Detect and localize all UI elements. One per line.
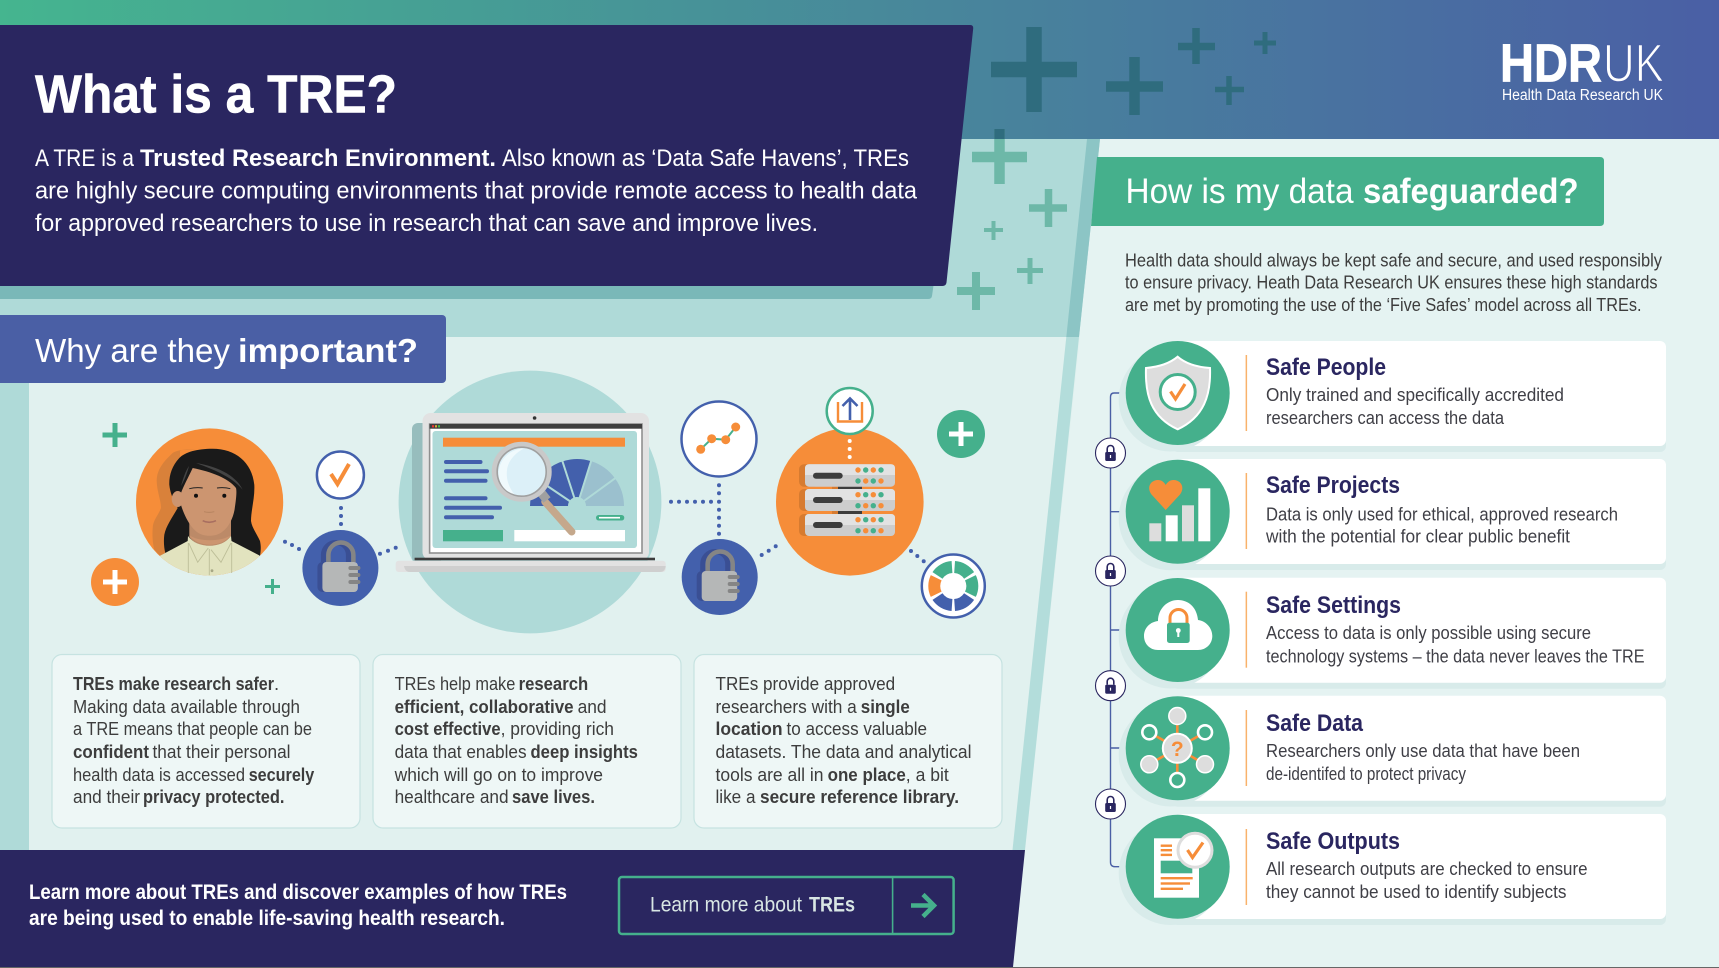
card: safe outputs: All research outputs are checked to ensure: [1266, 858, 1588, 879]
icon: padlock right: [682, 539, 758, 615]
text card: safer: [52, 654, 360, 828]
text card: single location: single: [861, 696, 910, 717]
text card: single location: one place: [828, 764, 906, 785]
card: safe data: [1119, 696, 1666, 807]
card: safe people: [1119, 341, 1666, 452]
card: safe people: researchers can access the data: [1266, 407, 1505, 428]
icon: green plus: [102, 423, 127, 447]
text card: single location: datasets. The data and analytical: [716, 741, 972, 762]
icon: small green plus: [265, 579, 280, 594]
text card: single location: location: [716, 718, 782, 739]
text card: safer: Making data available through: [73, 696, 300, 717]
icon: chain lock 1: [1096, 438, 1126, 468]
icon: chain lock 3: [1096, 671, 1126, 701]
icon: orange plus circle: [91, 558, 139, 606]
button: learn more: [619, 877, 954, 934]
card: safe settings: technology systems – the data never leaves the TRE: [1266, 646, 1644, 666]
card: safe people: Safe People: [1266, 354, 1386, 381]
logo: HDR UK: Health Data Research UK: [1502, 87, 1664, 104]
text card: efficient: deep insights: [530, 741, 638, 762]
card: safe settings: Access to data is only possible using secure: [1266, 622, 1591, 643]
text: safeguarding intro: are met by promoting the use of the ‘Five Safes’ model across all TREs.: [1125, 294, 1642, 315]
big teal circle behind laptop: [399, 371, 661, 633]
intro text: Also known as ‘Data Safe Havens’, TREs: [502, 145, 909, 172]
illustration: secure data flow: [91, 371, 985, 633]
text card: safer: securely: [249, 764, 315, 785]
panel: what is a TRE: [0, 25, 973, 286]
text card: efficient: and: [578, 696, 607, 717]
icon: padlock left: [302, 530, 378, 606]
icon: bars and heart: [1149, 480, 1210, 541]
text card: single location: to access valuable: [786, 718, 927, 739]
logo: HDR UK: UK: [1603, 34, 1664, 94]
card: safe projects: Safe Projects: [1266, 472, 1400, 499]
panel shadow strip: [0, 275, 935, 299]
dotted connectors: [283, 483, 926, 563]
card: safe projects: Data is only used for ethical, approved research: [1266, 504, 1618, 525]
text: safeguarding intro: Health data should always be kept safe and secure, and used responsibly: [1125, 250, 1663, 270]
text card: safer: .: [274, 673, 279, 694]
text card: single location: [694, 654, 1002, 828]
intro text: are highly secure computing environments that provide remote access to health data: [35, 178, 917, 204]
card: safe settings: Safe Settings: [1266, 592, 1401, 619]
decorative plus signs: [957, 27, 1276, 310]
icon: cloud lock: [1144, 600, 1212, 650]
text card: single location: , a bit: [906, 764, 949, 785]
icon: checked document: [1154, 833, 1212, 898]
card: safe people: Only trained and specifically accredited: [1266, 384, 1564, 405]
icon: arrow: [911, 894, 934, 916]
card: safe settings: [1119, 578, 1666, 689]
icon: donut chart circle: [922, 554, 985, 618]
heading: why are they important: Why are they: [35, 332, 230, 369]
text card: efficient: cost effective: [395, 718, 501, 739]
logo: HDR UK: [1500, 34, 1664, 104]
text card: safer: and their: [73, 786, 140, 807]
icon: upload circle: [827, 388, 873, 434]
heading: how is my data safeguarded: How is my data: [1126, 172, 1354, 211]
call-to-action text: [29, 881, 567, 930]
text card: single location: like a: [716, 786, 756, 807]
icon: line chart circle: [682, 402, 756, 476]
text card: safer: that their personal: [152, 741, 290, 762]
intro text: for approved researchers to use in research that can save and improve lives.: [35, 210, 818, 237]
text card: safer: a TRE means that people can be: [73, 718, 312, 739]
logo: HDR UK: HDR: [1500, 34, 1602, 94]
text card: efficient: healthcare and: [395, 786, 509, 807]
button: learn more: Learn more about: [650, 894, 802, 917]
text card: single location: tools are all in: [716, 764, 824, 785]
icon: laptop with dashboard: [396, 413, 666, 572]
text: safeguarding intro: [1125, 250, 1663, 315]
heading: why are they important: [0, 315, 446, 383]
card: safe projects: with the potential for clear public benefit: [1265, 526, 1570, 546]
card: safe data: de-identifed to protect privacy: [1266, 763, 1467, 784]
text card: single location: secure reference library.: [760, 786, 959, 807]
text card: efficient: , providing rich: [501, 718, 614, 739]
button: learn more: TREs: [809, 894, 855, 917]
intro text: [35, 145, 917, 237]
icon: network: ?: [1171, 738, 1184, 761]
card: safe outputs: they cannot be used to identify subjects: [1266, 881, 1566, 902]
top gradient banner: [0, 0, 1719, 139]
icon: network: [1141, 708, 1214, 787]
text card: efficient: save lives.: [512, 786, 595, 807]
text card: efficient: [373, 654, 681, 828]
icon: shield: [1146, 357, 1210, 429]
text card: efficient: efficient, collaborative: [395, 696, 574, 717]
card: safe data: Researchers only use data that have been: [1266, 740, 1580, 761]
icon: chain lock 2: [1096, 556, 1126, 586]
card: safe outputs: Safe Outputs: [1266, 828, 1400, 855]
call-to-action text: are being used to enable life-saving health research.: [29, 907, 505, 930]
card: safe outputs: [1119, 814, 1666, 925]
icon: researcher portrait: [136, 428, 283, 580]
heading: how is my data safeguarded: safeguarded?: [1363, 172, 1579, 211]
intro text: A TRE is a: [35, 145, 134, 172]
text card: single location: researchers with a: [716, 696, 857, 717]
icon: chain lock 4: [1096, 789, 1126, 819]
text card: safer: health data is accessed: [73, 764, 245, 785]
card: safe data: Safe Data: [1266, 710, 1364, 737]
call-to-action text: Learn more about TREs and discover examples of how TREs: [29, 881, 567, 904]
heading: how is my data safeguarded: [1091, 157, 1604, 226]
text card: single location: TREs provide approved: [716, 673, 895, 694]
text card: efficient: research: [519, 673, 588, 694]
intro text: Trusted Research Environment.: [140, 145, 496, 172]
card: safe projects: [1119, 459, 1666, 570]
heading: why are they important: important?: [238, 332, 418, 369]
text card: efficient: which will go on to improve: [394, 764, 603, 785]
icon: check circle: [317, 452, 364, 498]
text card: safer: TREs make research safer: [73, 673, 274, 694]
text card: efficient: data that enables: [395, 741, 527, 762]
text card: efficient: TREs help make: [395, 673, 515, 694]
call-to-action bar: [0, 850, 1025, 967]
title: What is a TRE?: [35, 64, 397, 124]
icon: server stack: [776, 428, 924, 576]
text: safeguarding intro: to ensure privacy. Heath Data Research UK ensures these high standards: [1125, 272, 1658, 292]
text card: safer: privacy protected.: [143, 786, 284, 807]
connector line between the five safes: [1110, 393, 1124, 867]
text card: safer: confident: [73, 741, 149, 762]
icon: green plus circle: [937, 410, 985, 458]
